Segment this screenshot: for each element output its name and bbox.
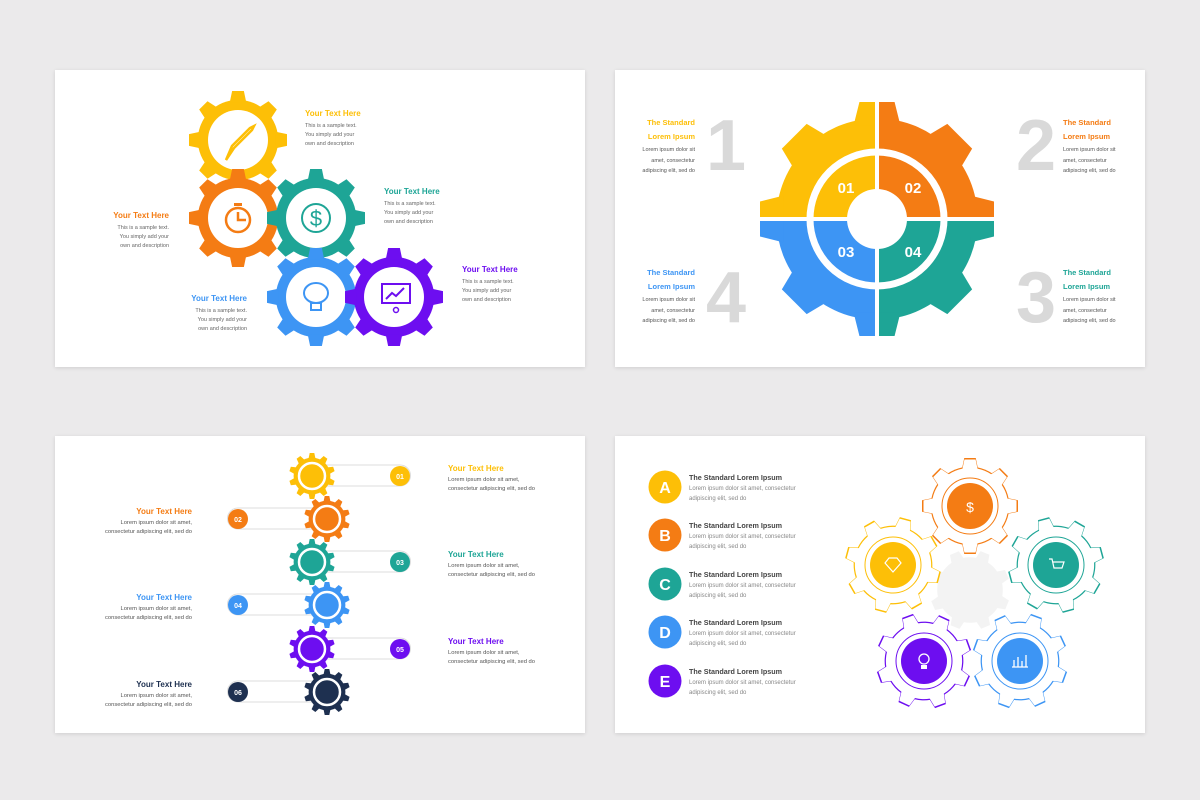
gear: purple chart board <box>345 248 443 346</box>
text: blue: This is a sample text. <box>195 308 247 314</box>
text: yellow: own and description <box>305 141 354 147</box>
list: texts: The Standard Lorem Ipsum <box>689 473 782 482</box>
text: item 4: amet, consectetur <box>651 308 695 314</box>
panel: vertical gear steps: Lorem ipsum dolor sit amet, <box>120 606 192 612</box>
panel: vertical gear steps: consectetur adipiscing elit, sed do <box>105 615 192 621</box>
panel: outline gear cluster: Lorem ipsum dolor sit amet, consectetur <box>689 680 796 686</box>
text: purple <box>462 265 518 303</box>
text: item 2: amet, consectetur <box>1063 158 1107 164</box>
list: texts: The Standard Lorem Ipsum <box>689 667 782 676</box>
text: item 3: amet, consectetur <box>1063 308 1107 314</box>
panel: outline gear cluster: adipiscing elit, sed do <box>689 544 747 550</box>
connector pills <box>228 465 410 702</box>
gear: yellow rocket <box>189 91 287 189</box>
step 05: 05 <box>396 647 404 654</box>
panel: vertical gear steps: Lorem ipsum dolor sit amet, <box>448 563 520 569</box>
panel: outline gear cluster: adipiscing elit, sed do <box>689 496 747 502</box>
gear: blue brain <box>267 248 365 346</box>
big gear: 01 <box>838 180 854 197</box>
step texts: Your Text Here <box>448 637 504 646</box>
text: blue: You simply add your <box>198 317 247 323</box>
step 04 <box>228 582 350 628</box>
step texts: Your Text Here <box>136 507 193 516</box>
text: teal: Your Text Here <box>384 187 440 196</box>
list: texts: The Standard Lorem Ipsum <box>689 618 782 627</box>
text: orange: own and description <box>120 243 169 249</box>
text: item 3: The Standard <box>1063 268 1111 277</box>
panel: linked gears <box>55 70 585 367</box>
panel: vertical gear steps: Lorem ipsum dolor sit amet, <box>120 693 192 699</box>
gear: teal dollar: $ <box>310 206 322 231</box>
text: item 1: adipiscing elit, sed do <box>642 168 695 174</box>
step 01: 01 <box>396 474 404 481</box>
text: item 3: adipiscing elit, sed do <box>1063 318 1116 324</box>
panel: outline gear cluster: Lorem ipsum dolor sit amet, consectetur <box>689 583 796 589</box>
text: yellow: This is a sample text. <box>305 123 357 129</box>
big numbers: 3 <box>1016 258 1056 338</box>
text: item 2: The Standard <box>1063 118 1111 127</box>
text: item 2 <box>1063 118 1116 174</box>
text: item 1: Lorem ipsum dolor sit <box>642 147 695 153</box>
outline gear: blue <box>956 597 1084 725</box>
text: item 2: Lorem ipsum dolor sit <box>1063 147 1116 153</box>
list: letters: A <box>659 480 671 497</box>
text: item 2: Lorem Ipsum <box>1063 132 1110 141</box>
text: orange: This is a sample text. <box>117 225 169 231</box>
text: orange <box>113 211 170 249</box>
text: item 2: adipiscing elit, sed do <box>1063 168 1116 174</box>
text: blue: Your Text Here <box>191 294 248 303</box>
step 06: 06 <box>234 690 242 697</box>
text: item 1: Lorem Ipsum <box>648 132 695 141</box>
panel: outline gear cluster: adipiscing elit, sed do <box>689 593 747 599</box>
text: orange: You simply add your <box>120 234 169 240</box>
big gear: 02 <box>905 180 921 197</box>
step 06 <box>228 669 350 715</box>
big gear: 04 <box>905 244 922 261</box>
panel: quadrant gear <box>615 70 1145 367</box>
panel: vertical gear steps: Lorem ipsum dolor sit amet, <box>120 520 192 526</box>
panel: vertical gear steps: consectetur adipiscing elit, sed do <box>448 486 535 492</box>
gear: teal dollar <box>267 169 365 267</box>
step 02 <box>228 496 350 542</box>
panel: outline gear cluster: Lorem ipsum dolor sit amet, consectetur <box>689 631 796 637</box>
text: purple: This is a sample text. <box>462 279 514 285</box>
text: item 4 <box>642 268 695 324</box>
list: letters: B <box>659 528 671 545</box>
text: item 3: Lorem Ipsum <box>1063 282 1110 291</box>
outline gear: orange <box>922 458 1018 554</box>
panel: vertical gear steps <box>55 436 585 733</box>
panel: outline gear cluster: adipiscing elit, sed do <box>689 690 747 696</box>
big numbers: 2 <box>1016 106 1056 186</box>
panel: vertical gear steps: Lorem ipsum dolor sit amet, <box>448 650 520 656</box>
text: item 1: amet, consectetur <box>651 158 695 164</box>
text: blue <box>191 294 248 332</box>
list: texts: The Standard Lorem Ipsum <box>689 521 782 530</box>
text: yellow <box>305 109 361 147</box>
panel: vertical gear steps: consectetur adipiscing elit, sed do <box>448 572 535 578</box>
step texts: Your Text Here <box>448 550 504 559</box>
text: teal: You simply add your <box>384 210 433 216</box>
big gear <box>760 102 994 336</box>
panel: vertical gear steps: consectetur adipiscing elit, sed do <box>105 529 192 535</box>
gear: orange stopwatch <box>189 169 287 267</box>
text: yellow: You simply add your <box>305 132 354 138</box>
big gear: 03 <box>838 244 854 261</box>
list: letters: D <box>659 625 671 642</box>
panel: outline gear cluster <box>615 436 1145 733</box>
text: item 4: The Standard <box>647 268 695 277</box>
panel: vertical gear steps: consectetur adipiscing elit, sed do <box>105 702 192 708</box>
step texts: Your Text Here <box>136 680 193 689</box>
outline gear: orange: $ <box>966 499 974 515</box>
text: teal <box>384 187 440 225</box>
text: item 1: The Standard <box>647 118 695 127</box>
outline gear: purple <box>860 597 988 725</box>
step texts: Your Text Here <box>136 593 193 602</box>
outline gear: yellow <box>834 506 952 624</box>
list: texts: The Standard Lorem Ipsum <box>689 570 782 579</box>
panel: vertical gear steps: Lorem ipsum dolor sit amet, <box>448 477 520 483</box>
text: item 4: Lorem Ipsum <box>648 282 695 291</box>
center gray gear <box>918 538 1022 642</box>
text: item 1 <box>642 118 695 174</box>
text: item 4: Lorem ipsum dolor sit <box>642 297 695 303</box>
list: texts <box>689 473 782 676</box>
big numbers <box>706 106 1056 338</box>
text: teal: own and description <box>384 219 433 225</box>
panel: outline gear cluster: Lorem ipsum dolor sit amet, consectetur <box>689 534 796 540</box>
list: letters <box>648 470 682 698</box>
text: yellow: Your Text Here <box>305 109 361 118</box>
list: letters: E <box>660 674 671 691</box>
list: letters: C <box>659 577 671 594</box>
step 05 <box>289 626 410 672</box>
step texts <box>136 464 504 689</box>
panel: outline gear cluster: Lorem ipsum dolor sit amet, consectetur <box>689 486 796 492</box>
step 02: 02 <box>234 517 242 524</box>
text: item 4: adipiscing elit, sed do <box>642 318 695 324</box>
text: purple: Your Text Here <box>462 265 518 274</box>
step 04: 04 <box>234 603 242 610</box>
big numbers: 1 <box>706 106 746 186</box>
step 03: 03 <box>396 560 404 567</box>
text: item 3 <box>1063 268 1116 324</box>
text: blue: own and description <box>198 326 247 332</box>
text: purple: own and description <box>462 297 511 303</box>
outline gear: teal <box>997 506 1115 624</box>
text: item 3: Lorem ipsum dolor sit <box>1063 297 1116 303</box>
step 01 <box>289 453 410 499</box>
text: purple: You simply add your <box>462 288 511 294</box>
big numbers: 4 <box>706 258 746 338</box>
step 03 <box>289 539 410 585</box>
text: orange: Your Text Here <box>113 211 170 220</box>
text: teal: This is a sample text. <box>384 201 436 207</box>
panel: vertical gear steps: consectetur adipiscing elit, sed do <box>448 659 535 665</box>
panel: outline gear cluster: adipiscing elit, sed do <box>689 641 747 647</box>
step texts: Your Text Here <box>448 464 504 473</box>
